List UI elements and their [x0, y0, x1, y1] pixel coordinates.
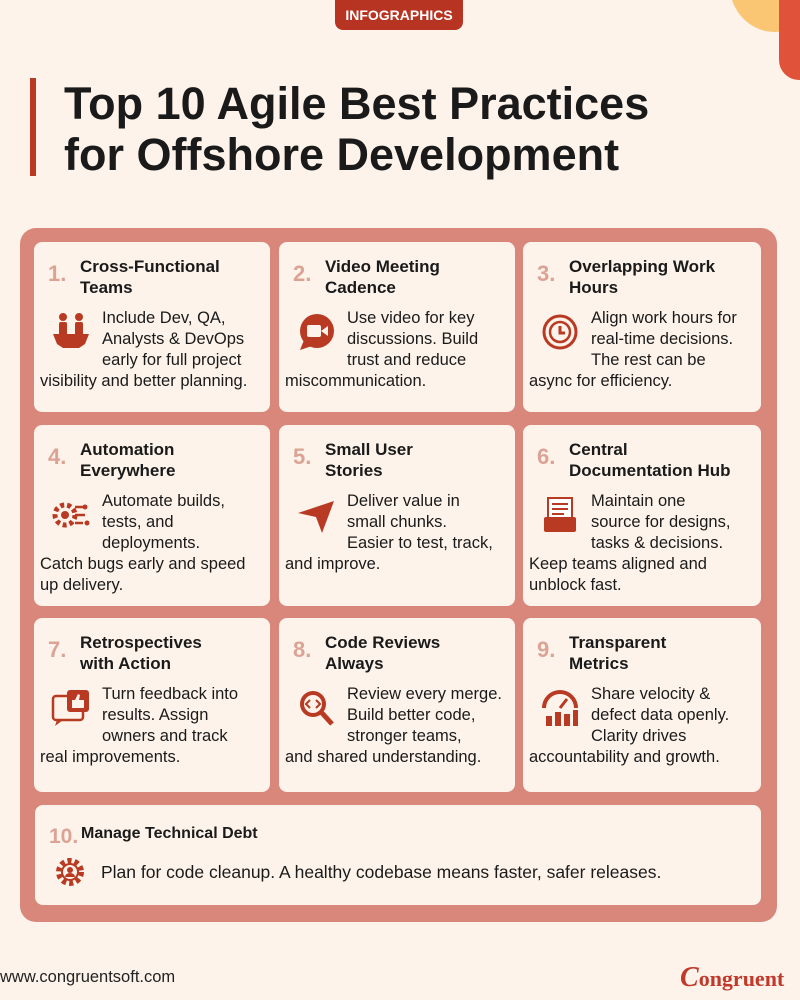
- card 2: Cadence: [325, 278, 396, 297]
- card 6: [523, 425, 761, 606]
- card 5: Small User: [325, 440, 413, 459]
- card 9: [523, 618, 761, 792]
- card 7: results. Assign: [102, 706, 208, 724]
- card 8: Always: [325, 654, 384, 673]
- card 1: visibility and better planning.: [40, 372, 247, 390]
- card 6: source for designs,: [591, 513, 730, 531]
- card 4: tests, and: [102, 513, 174, 531]
- card 7: real improvements.: [40, 748, 180, 766]
- card 4: Automation: [80, 440, 174, 459]
- card 3: The rest can be: [591, 351, 706, 369]
- icon: team: [53, 313, 89, 348]
- card 6: tasks & decisions.: [591, 534, 723, 552]
- card 6: Documentation Hub: [569, 461, 730, 480]
- card 4: up delivery.: [40, 576, 123, 594]
- card 2: miscommunication.: [285, 372, 426, 390]
- card 5: small chunks.: [347, 513, 447, 531]
- card 9: Share velocity &: [591, 685, 710, 703]
- card 1: early for full project: [102, 351, 241, 369]
- card 10: 10.: [49, 825, 78, 848]
- card 9: 9.: [537, 637, 555, 662]
- main panel: [20, 228, 777, 922]
- decorative shapes top right: [730, 0, 800, 32]
- card 9: Transparent: [569, 633, 666, 652]
- card 2: 2.: [293, 261, 311, 286]
- badge: [335, 0, 463, 30]
- icon: gear person: [56, 858, 84, 886]
- card 7: owners and track: [102, 727, 228, 745]
- card 3: async for efficiency.: [529, 372, 672, 390]
- card 10: Plan for code cleanup. A healthy codebase means faster, safer releases.: [101, 862, 661, 882]
- icon: paper plane: [298, 501, 334, 533]
- card 7: with Action: [80, 654, 171, 673]
- icon: gauge chart: [542, 690, 578, 726]
- card 2: trust and reduce: [347, 351, 466, 369]
- card 3: [523, 242, 761, 412]
- card 7: Retrospectives: [80, 633, 202, 652]
- card 1: Cross-Functional: [80, 257, 220, 276]
- icon: documents: [544, 497, 576, 532]
- card 2: discussions. Build: [347, 330, 478, 348]
- card 10: Manage Technical Debt: [81, 825, 258, 842]
- card 6: Keep teams aligned and: [529, 555, 707, 573]
- card 6: unblock fast.: [529, 576, 622, 594]
- card 8: stronger teams,: [347, 727, 462, 745]
- card 8: [279, 618, 515, 792]
- card 3: Align work hours for: [591, 309, 737, 327]
- card 1: 1.: [48, 261, 66, 286]
- card 8: Review every merge.: [347, 685, 502, 703]
- title: Top 10 Agile Best Practices: [64, 78, 649, 129]
- card 9: accountability and growth.: [529, 748, 720, 766]
- icon: thumbs up: [52, 690, 89, 726]
- card 2: Use video for key: [347, 309, 474, 327]
- card 5: Stories: [325, 461, 383, 480]
- card 8: Build better code,: [347, 706, 475, 724]
- card 3: 3.: [537, 261, 555, 286]
- card 8: Code Reviews: [325, 633, 440, 652]
- card 7: [34, 618, 270, 792]
- card 4: Catch bugs early and speed: [40, 555, 245, 573]
- card 9: Clarity drives: [591, 727, 686, 745]
- footer url: www.congruentsoft.com: [0, 968, 175, 986]
- card 5: and improve.: [285, 555, 380, 573]
- card 5: Deliver value in: [347, 492, 460, 510]
- icon: gear: [52, 502, 90, 528]
- icon: video: [300, 314, 334, 350]
- card 6: Maintain one: [591, 492, 685, 510]
- card 8: and shared understanding.: [285, 748, 481, 766]
- card 6: Central: [569, 440, 628, 459]
- icon: clock: [542, 314, 578, 350]
- card 2: Video Meeting: [325, 257, 440, 276]
- card 1: [34, 242, 270, 412]
- card 4: Everywhere: [80, 461, 175, 480]
- card 9: Metrics: [569, 654, 629, 673]
- card 8: 8.: [293, 637, 311, 662]
- card 5: 5.: [293, 444, 311, 469]
- card 9: defect data openly.: [591, 706, 729, 724]
- card 7: 7.: [48, 637, 66, 662]
- card 7: Turn feedback into: [102, 685, 238, 703]
- card 1: Analysts & DevOps: [102, 330, 244, 348]
- card 10: [35, 805, 761, 905]
- card 5: Easier to test, track,: [347, 534, 493, 552]
- card 4: [34, 425, 270, 606]
- card 4: deployments.: [102, 534, 200, 552]
- card 3: Hours: [569, 278, 618, 297]
- card 4: 4.: [48, 444, 66, 469]
- title: for Offshore Development: [64, 129, 619, 180]
- icon: code search: [300, 691, 334, 726]
- logo: Congruent: [680, 962, 784, 993]
- card 1: Teams: [80, 278, 133, 297]
- card 2: [279, 242, 515, 412]
- card 4: Automate builds,: [102, 492, 225, 510]
- card 6: 6.: [537, 444, 555, 469]
- badge: INFOGRAPHICS: [345, 7, 453, 23]
- card 3: real-time decisions.: [591, 330, 733, 348]
- card 1: Include Dev, QA,: [102, 309, 226, 327]
- card 5: [279, 425, 515, 606]
- title: [30, 78, 770, 176]
- card 3: Overlapping Work: [569, 257, 715, 276]
